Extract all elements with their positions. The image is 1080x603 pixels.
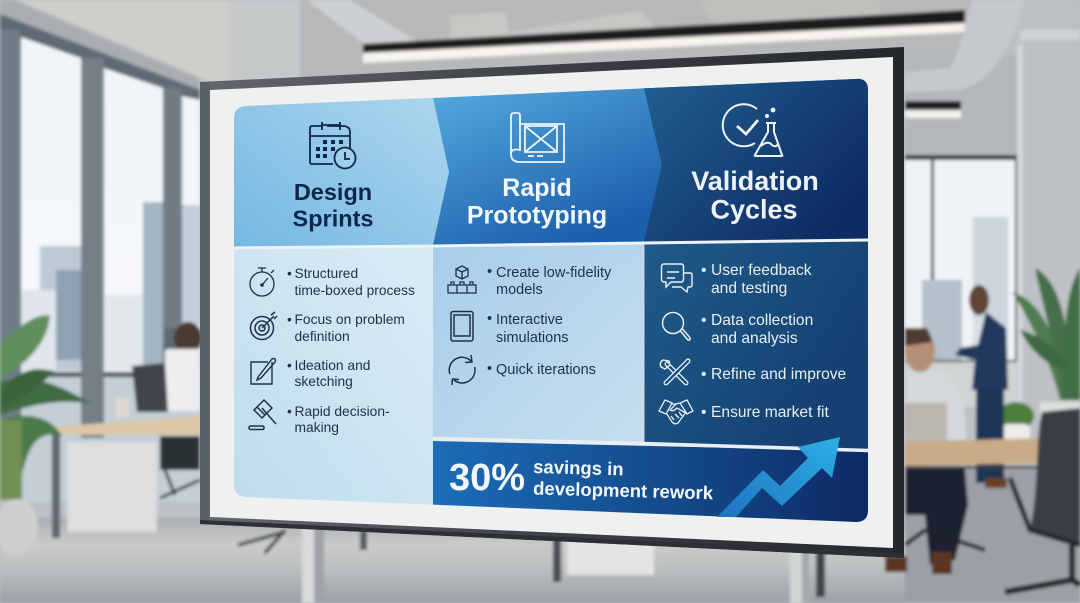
heading: Rapid Prototyping: Rapid bbox=[502, 174, 572, 202]
standing person bbox=[955, 285, 1008, 488]
banner divider bbox=[433, 438, 868, 450]
left desk and person bbox=[48, 322, 202, 538]
item: rapid decision-making: Rapid decision- bbox=[294, 404, 390, 419]
ceiling and walls bbox=[0, 0, 1080, 460]
item: refine and improve: • bbox=[701, 366, 706, 383]
item: quick iterations: Quick iterations bbox=[496, 362, 596, 378]
stand legs and furniture below board bbox=[238, 525, 825, 603]
heading: Rapid Prototyping bbox=[467, 174, 607, 230]
item: data collection and analysis: and analysis bbox=[711, 330, 798, 347]
seated man bbox=[885, 328, 985, 574]
board frame bbox=[200, 47, 904, 558]
right window bbox=[905, 155, 1017, 407]
icon: blueprint bbox=[511, 113, 564, 162]
item: interactive simulations: • bbox=[487, 311, 492, 327]
item: refine and improve bbox=[660, 360, 846, 383]
floor bbox=[0, 518, 1080, 603]
heading: Validation Cycles: Validation bbox=[691, 166, 819, 196]
item: user feedback and testing: • bbox=[701, 262, 706, 279]
item: ideation and sketching bbox=[251, 358, 370, 389]
item: focus on problem definition: definition bbox=[294, 329, 350, 344]
heading: Validation Cycles: Cycles bbox=[710, 194, 798, 224]
right desk bbox=[905, 437, 1080, 469]
statistic: 30% savings bbox=[449, 456, 714, 503]
statistic: 30% savings: savings in bbox=[533, 456, 624, 479]
item: structured time-boxed process: time-boxed process bbox=[294, 283, 415, 298]
icon: check and flask bbox=[723, 104, 782, 156]
icon: calendar with clock bbox=[310, 122, 356, 168]
item: ideation and sketching: • bbox=[287, 358, 292, 373]
item: interactive simulations bbox=[451, 311, 569, 346]
item: quick iterations bbox=[449, 355, 596, 385]
item: focus on problem definition: • bbox=[287, 312, 292, 327]
item: interactive simulations: Interactive bbox=[496, 312, 563, 328]
item: user feedback and testing: User feedback bbox=[711, 262, 812, 279]
list: design sprints bbox=[249, 266, 415, 435]
column 2 body bbox=[433, 240, 644, 445]
heading: Rapid Prototyping: Prototyping bbox=[467, 202, 607, 230]
item: data collection and analysis: • bbox=[701, 312, 706, 329]
item: ideation and sketching: Ideation and bbox=[294, 358, 370, 373]
board white surface bbox=[210, 57, 893, 548]
item: rapid decision-making: making bbox=[294, 420, 339, 435]
item: create low-fidelity models bbox=[448, 264, 612, 298]
ceiling lights and ducts bbox=[307, 0, 1025, 118]
item: ensure market fit: Ensure market fit bbox=[711, 404, 830, 421]
item: rapid decision-making: • bbox=[287, 404, 292, 419]
item: create low-fidelity models: • bbox=[487, 264, 492, 280]
item: rapid decision-making bbox=[249, 400, 390, 435]
item: create low-fidelity models: models bbox=[496, 282, 543, 298]
item: user feedback and testing bbox=[662, 262, 812, 297]
item: structured time-boxed process: Structured bbox=[294, 266, 358, 281]
heading: Design Sprints bbox=[293, 179, 373, 232]
icon: growth arrow bbox=[717, 437, 840, 517]
item: structured time-boxed process bbox=[250, 266, 415, 298]
item: user feedback and testing: and testing bbox=[711, 280, 787, 297]
list: validation cycles bbox=[659, 262, 846, 424]
item: ensure market fit bbox=[659, 400, 830, 424]
heading: Design Sprints: Design bbox=[294, 179, 372, 205]
item: data collection and analysis: Data collection bbox=[711, 312, 813, 329]
item: interactive simulations: simulations bbox=[496, 330, 569, 346]
display board bbox=[200, 47, 904, 558]
column 3 header edge bbox=[644, 76, 868, 242]
column 1 header bbox=[234, 98, 449, 246]
item: quick iterations: • bbox=[487, 361, 492, 377]
left plant bbox=[0, 315, 92, 555]
item: ensure market fit: • bbox=[701, 404, 706, 421]
heading: Validation Cycles bbox=[691, 166, 819, 224]
infographic panel bbox=[234, 70, 868, 530]
item: create low-fidelity models: Create low-fidelity bbox=[496, 265, 612, 281]
banner bbox=[433, 441, 868, 530]
item: focus on problem definition: Focus on problem bbox=[294, 312, 405, 327]
header divider bbox=[234, 240, 868, 248]
item: focus on problem definition bbox=[250, 312, 405, 344]
statistic: 30% savings: 30% bbox=[449, 457, 525, 499]
item: refine and improve: Refine and improve bbox=[711, 366, 846, 383]
heading: Design Sprints: Sprints bbox=[293, 206, 373, 232]
item: data collection and analysis bbox=[662, 312, 813, 347]
column 2 header arrow bbox=[433, 88, 662, 245]
foreground office chair bbox=[1005, 408, 1080, 592]
left windows bbox=[0, 0, 201, 502]
item: ideation and sketching: sketching bbox=[294, 374, 353, 389]
column 3 header bbox=[640, 70, 868, 242]
column 1 body bbox=[234, 240, 439, 510]
statistic: 30% savings: development rework bbox=[533, 478, 714, 503]
column 3 body bbox=[644, 235, 868, 452]
item: structured time-boxed process: • bbox=[287, 266, 292, 281]
right plants bbox=[998, 268, 1080, 446]
list: rapid prototyping bbox=[448, 264, 612, 385]
